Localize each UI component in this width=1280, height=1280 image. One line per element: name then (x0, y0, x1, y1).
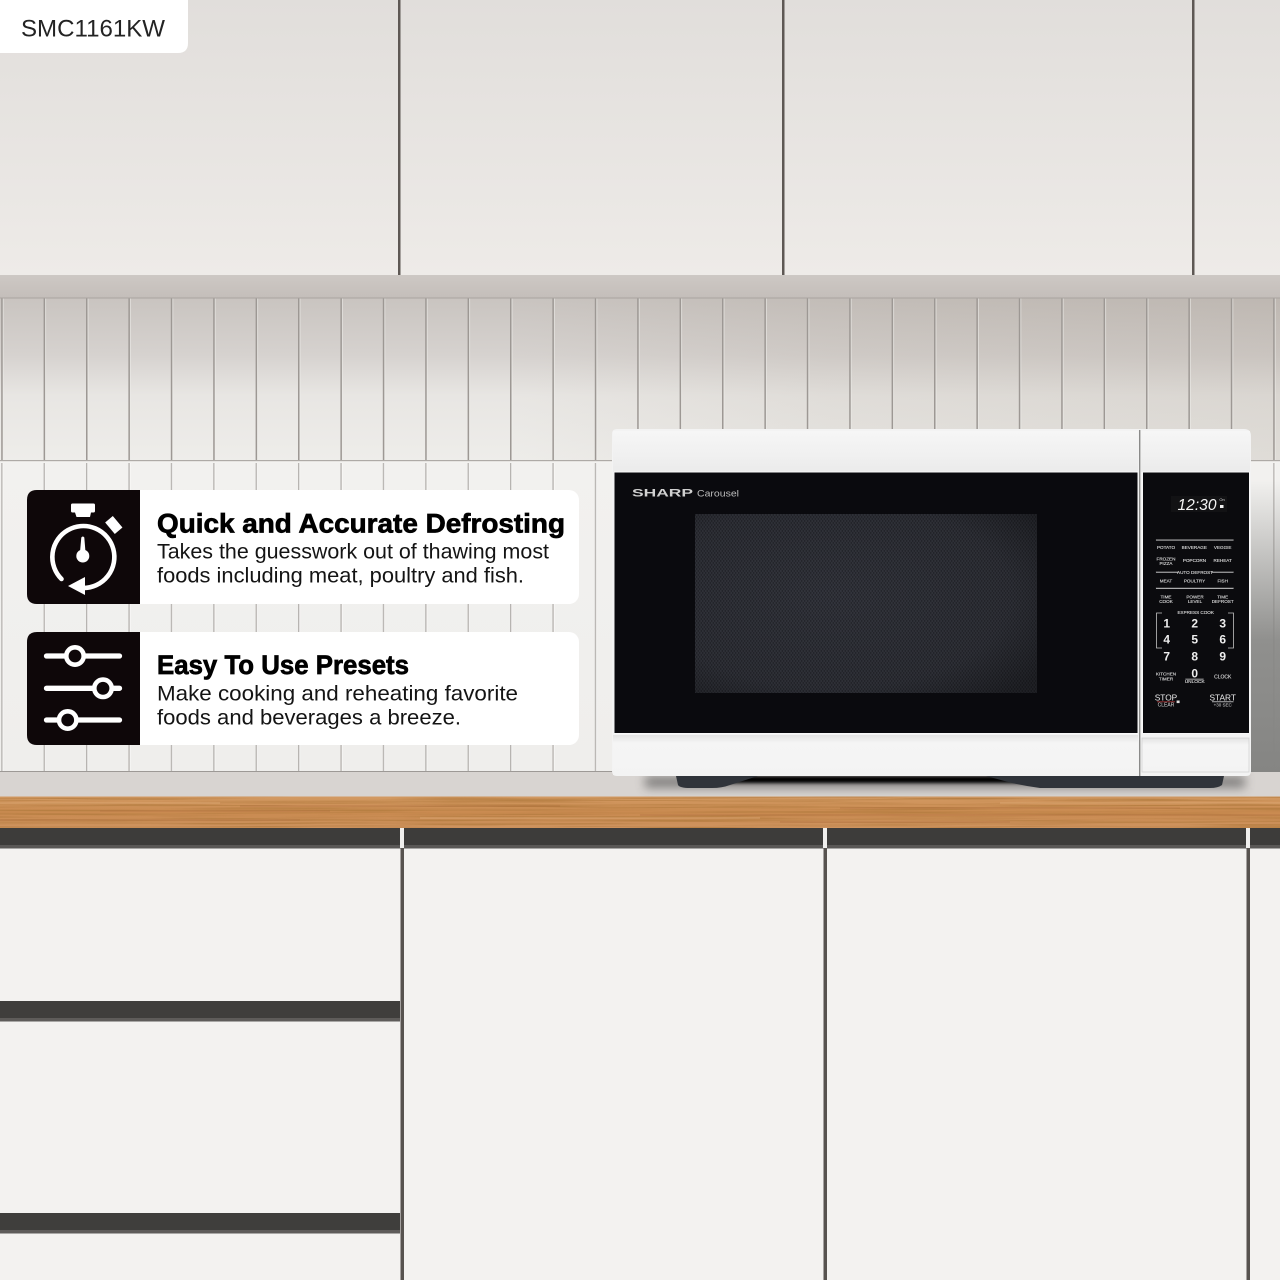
lower cabinets (0, 828, 1280, 1280)
white frame highlights (614, 472, 1250, 734)
card background (27, 490, 579, 604)
icon tile: sliders (27, 632, 140, 745)
upper cabinets (0, 0, 1280, 275)
preset button labels: FROZEN (1157, 556, 1175, 561)
function keys: KITCHEN (1156, 672, 1176, 677)
number keypad: 7 (1163, 649, 1170, 663)
microwave shadows (645, 480, 1280, 788)
feature card: defrosting (27, 490, 579, 604)
card background (27, 632, 579, 745)
clock display (1171, 496, 1227, 514)
microwave oven (612, 429, 1280, 788)
description: Takes the guesswork out of thawing most (157, 540, 549, 563)
door glass panel (614, 472, 1138, 733)
brand logo (632, 488, 739, 500)
stop and start keys: CLEAR (1158, 703, 1175, 709)
microwave body (612, 429, 1251, 776)
number keypad: 4 (1163, 633, 1170, 647)
counter back surface (0, 772, 1280, 797)
number keypad: 3 (1219, 616, 1226, 630)
preset button labels (1156, 540, 1234, 615)
heading: Quick and Accurate Defrosting (157, 508, 565, 538)
feature card: presets (27, 632, 579, 745)
control panel (1142, 472, 1250, 733)
model number tab (0, 0, 188, 53)
function keys (1156, 672, 1232, 685)
preset button labels: TIME (1217, 594, 1228, 599)
microwave window mesh (695, 514, 1037, 693)
microwave feet (676, 776, 1224, 788)
number keypad: 5 (1191, 633, 1198, 647)
stop and start keys: +30 SEC (1214, 703, 1233, 708)
description: foods and beverages a breeze. (157, 706, 461, 729)
function keys: CLOCK (1214, 674, 1232, 680)
description: Make cooking and reheating favorite (157, 682, 518, 705)
preset button labels: MEAT (1160, 578, 1172, 583)
preset button labels: PIZZA (1159, 561, 1173, 566)
preset button labels: AUTO DEFROST (1177, 570, 1213, 575)
preset button labels: POTATO (1157, 545, 1175, 550)
preset button labels: POPCORN (1183, 558, 1206, 563)
function keys: TIMER (1159, 677, 1174, 682)
express cook bracket (1156, 613, 1234, 648)
brand logo: SHARP (632, 488, 694, 500)
description: foods including meat, poultry and fish. (157, 564, 524, 587)
number keypad: 2 (1191, 616, 1198, 630)
preset button labels: TIME (1161, 594, 1171, 599)
preset button labels: FISH (1217, 578, 1228, 583)
preset button labels: LEVEL (1188, 599, 1203, 604)
wooden countertop (0, 796, 1280, 828)
preset button labels: EXPRESS COOK (1177, 610, 1215, 615)
stop and start keys: START (1209, 692, 1236, 702)
clock display: 12:30 (1178, 497, 1217, 514)
tile backsplash (0, 298, 1280, 772)
preset button labels: POULTRY (1184, 578, 1205, 583)
preset button labels: REHEAT (1214, 558, 1232, 563)
heading: Easy To Use Presets (157, 650, 409, 680)
preset button labels: BEVERAGE (1182, 545, 1207, 550)
brand logo: Carousel (697, 488, 739, 498)
stop and start keys (1155, 692, 1236, 709)
icon tile: stopwatch (27, 490, 140, 604)
description (157, 682, 518, 729)
description (157, 540, 549, 587)
number keypad (1163, 616, 1226, 680)
preset button labels: VEGGIE (1214, 545, 1232, 550)
under-cabinet band (0, 275, 1280, 298)
number keypad: 9 (1219, 649, 1226, 663)
number keypad: 0 (1191, 666, 1198, 680)
preset button labels: DEFROST (1212, 599, 1234, 604)
number keypad: 1 (1163, 616, 1170, 630)
clock display: On (1219, 497, 1225, 502)
number keypad: 8 (1191, 649, 1198, 663)
function keys: UNLOCK (1185, 679, 1205, 685)
preset button labels: POWER (1186, 594, 1204, 599)
model number tab: SMC1161KW (21, 16, 166, 42)
preset button labels: COOK (1159, 599, 1174, 604)
stop and start keys: STOP (1155, 692, 1178, 702)
number keypad: 6 (1219, 633, 1226, 647)
